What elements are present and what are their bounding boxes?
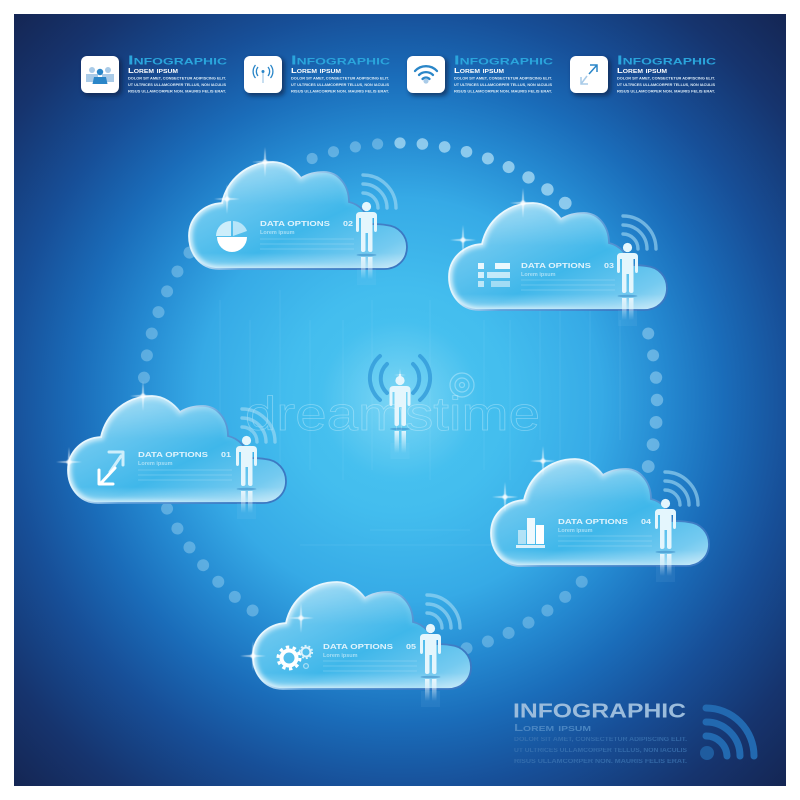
faint central grid lines <box>220 290 620 545</box>
header item 1: Lorem ipsum <box>128 68 178 75</box>
header item 2: DOLOR SIT AMET, CONSECTETUR ADIPISCING ELIT. <box>291 76 389 80</box>
bottom-right text block: UT ULTRICES ULLAMCORPER TELLUS, NON IACULIS <box>514 748 687 754</box>
header item 1: UT ULTRICES ULLAMCORPER TELLUS, NON IACULIS <box>128 82 226 87</box>
header item 3: UT ULTRICES ULLAMCORPER TELLUS, NON IACULIS <box>454 82 552 87</box>
header item 4: Lorem ipsum <box>617 68 667 75</box>
card text: 05 <box>406 642 416 651</box>
bottom-right text block: DOLOR SIT AMET, CONSECTETUR ADIPISCING ELIT. <box>514 737 687 743</box>
header item 4: Infographic <box>617 52 717 68</box>
cloud 01 <box>56 381 286 519</box>
header item 2 <box>244 52 391 96</box>
card text: DATA OPTIONS <box>260 219 330 228</box>
header item 3: RISUS ULLAMCORPER NON. MAURIS FELIS ERAT. <box>454 88 552 94</box>
dotted ring <box>137 137 663 656</box>
icon tile: arrows <box>570 56 611 96</box>
watermark spiral <box>450 373 474 397</box>
header item 2: UT ULTRICES ULLAMCORPER TELLUS, NON IACULIS <box>291 82 389 87</box>
card text: 03 <box>604 261 614 270</box>
card text: 02 <box>343 219 353 228</box>
bottom-right text block: INFOGRAPHIC <box>513 700 686 722</box>
header item 2: Lorem ipsum <box>291 68 341 75</box>
card text: Lorem ipsum <box>521 272 556 278</box>
header item 4 <box>570 52 717 96</box>
header item 1: Infographic <box>128 52 228 68</box>
cloud 02 <box>189 147 407 285</box>
card text: DATA OPTIONS <box>323 642 393 651</box>
icon: large wifi <box>700 708 754 760</box>
card text <box>323 642 417 671</box>
header item 3: Infographic <box>454 52 554 68</box>
bar chart icon <box>516 518 545 548</box>
header item 1: RISUS ULLAMCORPER NON. MAURIS FELIS ERAT. <box>128 88 226 94</box>
header item 1 <box>81 52 228 96</box>
header item 4: DOLOR SIT AMET, CONSECTETUR ADIPISCING ELIT. <box>617 76 715 80</box>
card text: Lorem ipsum <box>323 653 358 659</box>
bottom-right text block: Lorem ipsum <box>514 723 591 734</box>
header item 4: RISUS ULLAMCORPER NON. MAURIS FELIS ERAT. <box>617 88 715 94</box>
card text: Lorem ipsum <box>558 528 593 534</box>
card text: 01 <box>221 450 231 459</box>
card text: DATA OPTIONS <box>558 517 628 526</box>
arrows icon <box>99 452 123 484</box>
cloud 05 <box>240 582 471 707</box>
card text: Lorem ipsum <box>260 230 295 236</box>
gears icon <box>278 646 312 669</box>
header item 3: DOLOR SIT AMET, CONSECTETUR ADIPISCING ELIT. <box>454 76 552 80</box>
card text <box>138 450 232 480</box>
header item 4: UT ULTRICES ULLAMCORPER TELLUS, NON IACULIS <box>617 82 715 87</box>
card text <box>260 219 354 249</box>
icon tile: wifi <box>407 56 448 96</box>
list icon <box>478 263 510 287</box>
card text <box>521 261 615 290</box>
cloud 03 <box>449 188 667 326</box>
header item 2: RISUS ULLAMCORPER NON. MAURIS FELIS ERAT. <box>291 88 389 94</box>
header item 3: Lorem ipsum <box>454 68 504 75</box>
card text: Lorem ipsum <box>138 461 173 467</box>
header item 2: Infographic <box>291 52 391 68</box>
card text: DATA OPTIONS <box>521 261 591 270</box>
header item 1: DOLOR SIT AMET, CONSECTETUR ADIPISCING ELIT. <box>128 76 226 80</box>
icon tile: antenna <box>244 56 285 96</box>
icon tile: people <box>81 56 122 96</box>
bottom-right text block <box>513 700 687 765</box>
cloud 04 <box>491 446 709 582</box>
header item 3 <box>407 52 554 96</box>
pie chart icon <box>216 221 247 252</box>
card text: DATA OPTIONS <box>138 450 208 459</box>
watermark: dreamstime <box>245 387 540 440</box>
central person with signal <box>320 320 480 480</box>
card text <box>558 517 652 546</box>
bottom-right text block: RISUS ULLAMCORPER NON. MAURIS FELIS ERAT. <box>514 759 687 765</box>
card text: 04 <box>641 517 652 526</box>
